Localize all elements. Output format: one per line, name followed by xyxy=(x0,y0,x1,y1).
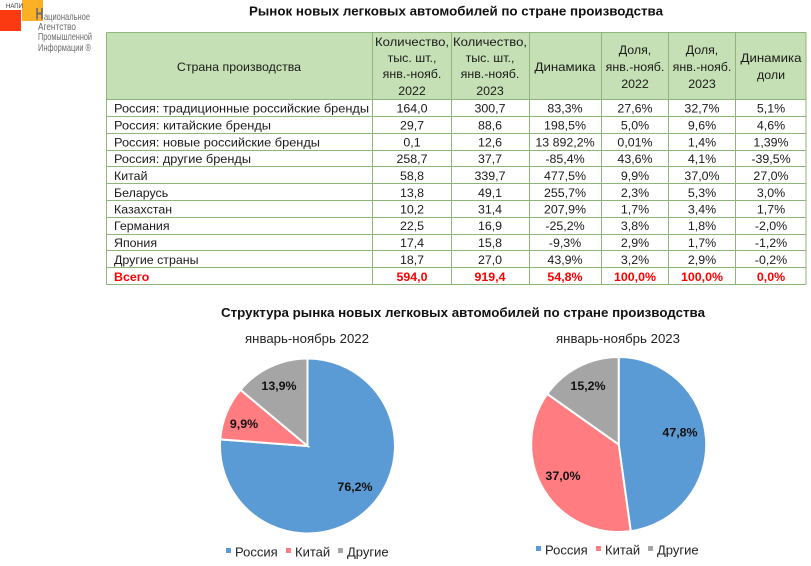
row: other brands: 37,7 xyxy=(478,152,502,166)
row: Kazakhstan: 1,7% xyxy=(621,202,649,216)
row: other brands: Россия: другие бренды xyxy=(114,152,251,166)
row: Belarus: 49,1 xyxy=(478,186,502,200)
row: traditional Russian brands: Россия: традиционные российские бренды xyxy=(114,102,369,116)
slice: other 15.2% xyxy=(547,357,619,444)
table header row: Количество, xyxy=(375,35,449,49)
pie chart 2023 xyxy=(531,332,706,558)
row: new Russian brands: Россия: новые российские бренды xyxy=(114,136,320,150)
row: total: 0,0% xyxy=(757,270,785,284)
row: total xyxy=(114,270,785,284)
legend 2022 xyxy=(226,544,389,560)
value labels 2023: 15,2% xyxy=(570,379,606,393)
row: Japan: Япония xyxy=(114,236,157,250)
table header row: доли xyxy=(757,68,785,82)
logo: НАПИ: Информации ® xyxy=(38,42,91,54)
value labels 2023: 47,8% xyxy=(662,426,698,440)
row: Chinese brands: 198,5% xyxy=(544,118,586,132)
row: total: 54,8% xyxy=(547,270,583,284)
table header background xyxy=(106,32,806,100)
row: China: 339,7 xyxy=(474,169,506,183)
row: Japan: 2,9% xyxy=(621,236,649,250)
table xyxy=(106,32,806,284)
row: other brands: 43,6% xyxy=(617,152,653,166)
row: traditional Russian brands: 5,1% xyxy=(757,102,785,116)
row: Chinese brands: 5,0% xyxy=(621,118,649,132)
row: China xyxy=(114,169,789,183)
row: new Russian brands: 1,39% xyxy=(753,136,789,150)
slice: other 13.9% xyxy=(240,358,308,446)
table header row: янв.-нояб. xyxy=(461,67,519,81)
row: other countries: 3,2% xyxy=(621,253,649,267)
row: Germany: 16,9 xyxy=(478,219,502,233)
table header row: Доля, xyxy=(686,43,718,57)
table header row: тыс. шт., xyxy=(388,51,436,65)
table header row: Доля, xyxy=(619,43,651,57)
row: other countries: 18,7 xyxy=(400,253,424,267)
row: Japan: -1,2% xyxy=(755,236,787,250)
row: Belarus: 5,3% xyxy=(688,186,716,200)
row: other countries: 2,9% xyxy=(688,253,716,267)
row: Chinese brands: 4,6% xyxy=(757,118,785,132)
logo: НАПИ: ациональное xyxy=(44,12,90,23)
table header row: янв.-нояб. xyxy=(383,67,441,81)
row: Kazakhstan: 1,7% xyxy=(757,202,785,216)
row: new Russian brands: 13 892,2% xyxy=(535,136,595,150)
row: Belarus xyxy=(114,186,785,200)
row: Japan: 1,7% xyxy=(688,236,716,250)
row: China: 58,8 xyxy=(400,169,424,183)
charts heading: Структура рынка новых легковых автомобилей по стране производства xyxy=(221,305,706,320)
row: new Russian brands: 0,01% xyxy=(617,136,653,150)
row: Chinese brands: 88,6 xyxy=(478,118,502,132)
title: Рынок новых легковых автомобилей по стране производства xyxy=(249,4,664,18)
row: other brands: 4,1% xyxy=(688,152,716,166)
row: other countries: Другие страны xyxy=(114,253,199,267)
row: Japan xyxy=(114,236,787,250)
legend 2023: Китай xyxy=(605,542,640,558)
chart title 2023: январь-ноябрь 2023 xyxy=(556,332,680,346)
row: Belarus: 255,7% xyxy=(544,186,586,200)
row: other countries: -0,2% xyxy=(755,253,787,267)
row: total: 100,0% xyxy=(681,270,723,284)
row: Kazakhstan: 207,9% xyxy=(544,202,586,216)
row: Belarus: 3,0% xyxy=(757,186,785,200)
table header row: 2023 xyxy=(476,84,504,98)
table header row: Динамика xyxy=(740,51,802,65)
logo: НАПИ: НАПИ xyxy=(6,4,23,10)
value labels 2022 xyxy=(230,379,373,494)
row: Chinese brands xyxy=(114,118,785,132)
row: traditional Russian brands: 27,6% xyxy=(617,102,653,116)
row: new Russian brands: 12,6 xyxy=(478,136,502,150)
row: Kazakhstan: 31,4 xyxy=(478,202,502,216)
logo: НАПИ xyxy=(0,0,92,54)
value labels 2022: 13,9% xyxy=(261,379,297,393)
row: total: 594,0 xyxy=(396,270,428,284)
pie chart 2022 xyxy=(220,332,395,560)
row: Japan: -9,3% xyxy=(549,236,581,250)
row: other brands: -85,4% xyxy=(545,152,585,166)
legend 2022: Россия xyxy=(235,544,278,560)
row: Germany: 1,8% xyxy=(688,219,716,233)
row: Germany: -2,0% xyxy=(755,219,787,233)
value labels 2022: 9,9% xyxy=(230,417,258,431)
row: China: 477,5% xyxy=(544,169,586,183)
row: China: 27,0% xyxy=(753,169,789,183)
row: Belarus: 13,8 xyxy=(400,186,424,200)
row: Belarus: 2,3% xyxy=(621,186,649,200)
value labels 2023 xyxy=(545,379,698,483)
row: Chinese brands: 9,6% xyxy=(688,118,716,132)
table header row xyxy=(177,35,802,98)
row: other brands xyxy=(114,152,791,166)
chart title 2022: январь-ноябрь 2022 xyxy=(245,332,369,346)
legend 2022: Китай xyxy=(295,544,330,560)
legend 2023: Другие xyxy=(657,542,699,558)
row: new Russian brands: 1,4% xyxy=(688,136,716,150)
table header row: Динамика xyxy=(534,60,596,74)
row: Chinese brands: 29,7 xyxy=(400,118,424,132)
table header row: 2022 xyxy=(621,77,649,91)
table header row: янв.-нояб. xyxy=(606,60,664,74)
logo: НАПИ: Промышленной xyxy=(38,32,92,43)
row: total: 100,0% xyxy=(614,270,656,284)
value labels 2022: 76,2% xyxy=(337,480,373,494)
table grid lines xyxy=(106,32,806,284)
slice: China 37.0% xyxy=(531,394,631,532)
row: traditional Russian brands: 83,3% xyxy=(547,102,583,116)
legend 2023: Россия xyxy=(545,542,588,558)
row: China: Китай xyxy=(114,169,148,183)
row: China: 9,9% xyxy=(621,169,649,183)
slice: China 9.9% xyxy=(220,390,308,446)
logo: НАПИ: Н xyxy=(36,4,44,24)
legend 2022: Другие xyxy=(347,544,389,560)
row: other countries: 27,0 xyxy=(478,253,502,267)
row: Chinese brands: Россия: китайские бренды xyxy=(114,118,271,132)
row: new Russian brands: 0,1 xyxy=(403,136,421,150)
row: total: 919,4 xyxy=(474,270,506,284)
row: Japan: 17,4 xyxy=(400,236,424,250)
row: total: Всего xyxy=(114,270,150,284)
row: Germany: 22,5 xyxy=(400,219,424,233)
row: Kazakhstan xyxy=(114,202,785,216)
row: traditional Russian brands: 164,0 xyxy=(396,102,428,116)
row: Kazakhstan: 3,4% xyxy=(688,202,716,216)
row: Germany: -25,2% xyxy=(545,219,585,233)
row: Germany: Германия xyxy=(114,219,170,233)
table header row: 2022 xyxy=(398,84,426,98)
row: China: 37,0% xyxy=(684,169,720,183)
row: traditional Russian brands xyxy=(114,102,785,116)
row: Germany xyxy=(114,219,787,233)
row: new Russian brands xyxy=(114,136,789,150)
slice: Russia 76.2% xyxy=(220,358,395,533)
row: traditional Russian brands: 32,7% xyxy=(684,102,720,116)
table header row: янв.-нояб. xyxy=(673,60,731,74)
row: traditional Russian brands: 300,7 xyxy=(474,102,506,116)
row: other brands: 258,7 xyxy=(396,152,428,166)
row: other brands: -39,5% xyxy=(751,152,791,166)
legend 2023 xyxy=(536,542,699,558)
row: Kazakhstan: 10,2 xyxy=(400,202,424,216)
table header row: Страна производства xyxy=(177,60,301,74)
row: Japan: 15,8 xyxy=(478,236,502,250)
slice: Russia 47.8% xyxy=(619,357,706,531)
table header row: тыс. шт., xyxy=(466,51,514,65)
row: other countries xyxy=(114,253,787,267)
table header row: Количество, xyxy=(453,35,527,49)
logo: НАПИ: Агентство xyxy=(38,22,76,33)
row: other countries: 43,9% xyxy=(547,253,583,267)
table header row: 2023 xyxy=(688,77,716,91)
row: Germany: 3,8% xyxy=(621,219,649,233)
value labels 2023: 37,0% xyxy=(545,469,581,483)
row: Kazakhstan: Казахстан xyxy=(114,202,172,216)
row: Belarus: Беларусь xyxy=(114,186,168,200)
